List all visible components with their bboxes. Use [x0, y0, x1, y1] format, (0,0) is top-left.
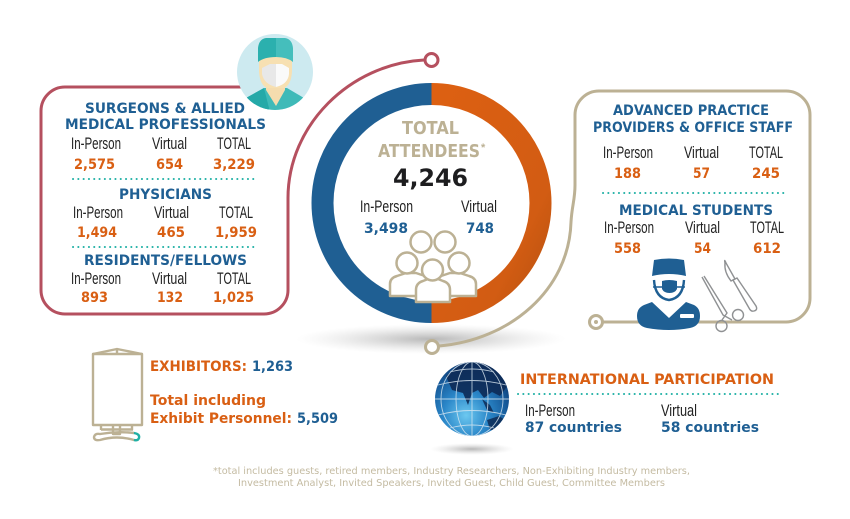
surgeons stats: Virtual — [152, 134, 187, 153]
physicians stats: 1,959 — [215, 225, 257, 241]
donut centre text: ATTENDEES — [378, 141, 480, 162]
surgeons stats: 2,575 — [74, 157, 115, 173]
exhibitors text: Exhibit Personnel: — [150, 411, 292, 427]
tan connector and panel outline — [439, 91, 810, 346]
exhibitors text: 5,509 — [297, 411, 338, 427]
residents stats: 893 — [81, 290, 108, 306]
international participation — [518, 372, 778, 436]
advanced practice stats: 188 — [614, 166, 641, 182]
residents stats: In-Person — [71, 269, 121, 288]
icon: masked surgeon avatar — [237, 34, 313, 112]
advanced practice stats: Virtual — [684, 143, 719, 162]
red connector and panel outline — [41, 60, 424, 314]
heading: advanced practice: PROVIDERS & OFFICE STAFF — [593, 120, 793, 136]
residents stats: Virtual — [152, 269, 187, 288]
heading: surgeons: MEDICAL PROFESSIONALS — [65, 117, 266, 133]
connector end ring — [425, 54, 438, 66]
icon: scissors and scalpel — [702, 260, 757, 332]
medical students stats: 612 — [753, 241, 781, 257]
heading: surgeons: SURGEONS & ALLIED — [85, 101, 245, 117]
physicians stats — [73, 203, 257, 241]
footnote: *total includes guests, retired members, Industry Researchers, Non-Exhibiting Industry members, — [213, 466, 690, 477]
medical students stats: TOTAL — [750, 218, 784, 237]
physicians stats: 465 — [157, 225, 185, 241]
physicians stats: In-Person — [73, 203, 123, 222]
residents stats: TOTAL — [217, 269, 251, 288]
physicians stats: 1,494 — [77, 225, 117, 241]
shadow under globe — [430, 443, 514, 455]
shadow under donut — [296, 324, 566, 354]
international participation: 87 countries — [525, 420, 622, 436]
heading: residents: RESIDENTS/FELLOWS — [84, 253, 247, 269]
residents stats: 1,025 — [213, 290, 254, 306]
heading: medical students: MEDICAL STUDENTS — [619, 203, 773, 219]
donut centre text: 748 — [466, 221, 494, 237]
medical students stats — [604, 218, 784, 257]
donut centre text — [360, 118, 497, 237]
international participation: INTERNATIONAL PARTICIPATION — [520, 372, 774, 388]
donut centre text: * — [481, 142, 486, 154]
medical students stats: Virtual — [685, 218, 720, 237]
international participation: In-Person — [525, 401, 575, 420]
international participation: 58 countries — [661, 420, 759, 436]
surgeons stats: TOTAL — [217, 134, 251, 153]
donut centre text: 3,498 — [364, 221, 408, 237]
medical students stats: 54 — [694, 241, 711, 257]
surgeons stats: In-Person — [71, 134, 121, 153]
exhibitors text: EXHIBITORS: — [150, 359, 247, 375]
surgeons stats: 654 — [156, 157, 183, 173]
heading: surgeons — [65, 101, 266, 133]
exhibitors text: 1,263 — [252, 359, 293, 375]
medical students stats: 558 — [614, 241, 641, 257]
residents stats — [71, 269, 254, 306]
segment: virtual — [432, 94, 540, 312]
heading: physicians: PHYSICIANS — [119, 187, 212, 203]
donut centre text: Virtual — [461, 197, 497, 216]
footnote: Investment Analyst, Invited Speakers, Invited Guest, Child Guest, Committee Members — [238, 478, 665, 489]
advanced practice stats — [603, 143, 783, 182]
medical students stats: In-Person — [604, 218, 654, 237]
donut chart: total attendees — [322, 94, 540, 312]
donut centre text: 4,246 — [393, 164, 468, 192]
donut centre text: TOTAL — [402, 118, 459, 139]
panel: surgeons, physicians, residents — [41, 54, 438, 314]
icon: globe — [435, 361, 509, 436]
residents stats: 132 — [157, 290, 183, 306]
surgeons stats: 3,229 — [213, 157, 255, 173]
connector end ring: panel — [590, 316, 602, 328]
segment: in-person — [322, 94, 432, 312]
banner stand teal tip — [134, 433, 139, 440]
exhibitors text: Total including — [150, 393, 266, 409]
icon: exhibit banner stand — [93, 349, 142, 440]
physicians stats: Virtual — [154, 203, 189, 222]
exhibitors text — [150, 359, 338, 427]
physicians stats: TOTAL — [219, 203, 253, 222]
donut centre text: In-Person — [360, 197, 413, 216]
panel: advanced practice and medical students — [426, 91, 810, 354]
globe landmasses — [446, 361, 508, 405]
heading: advanced practice: ADVANCED PRACTICE — [613, 103, 769, 119]
surgeons stats — [71, 134, 255, 173]
footnote — [213, 466, 690, 489]
advanced practice stats: 57 — [693, 166, 710, 182]
advanced practice stats: In-Person — [603, 143, 653, 162]
advanced practice stats: 245 — [752, 166, 780, 182]
icon: surgeon in mask — [637, 258, 700, 330]
icon: group of people — [390, 232, 476, 302]
international participation: Virtual — [661, 401, 697, 420]
advanced practice stats: TOTAL — [749, 143, 783, 162]
heading: advanced practice — [593, 103, 793, 136]
connector end ring: donut — [426, 340, 438, 354]
